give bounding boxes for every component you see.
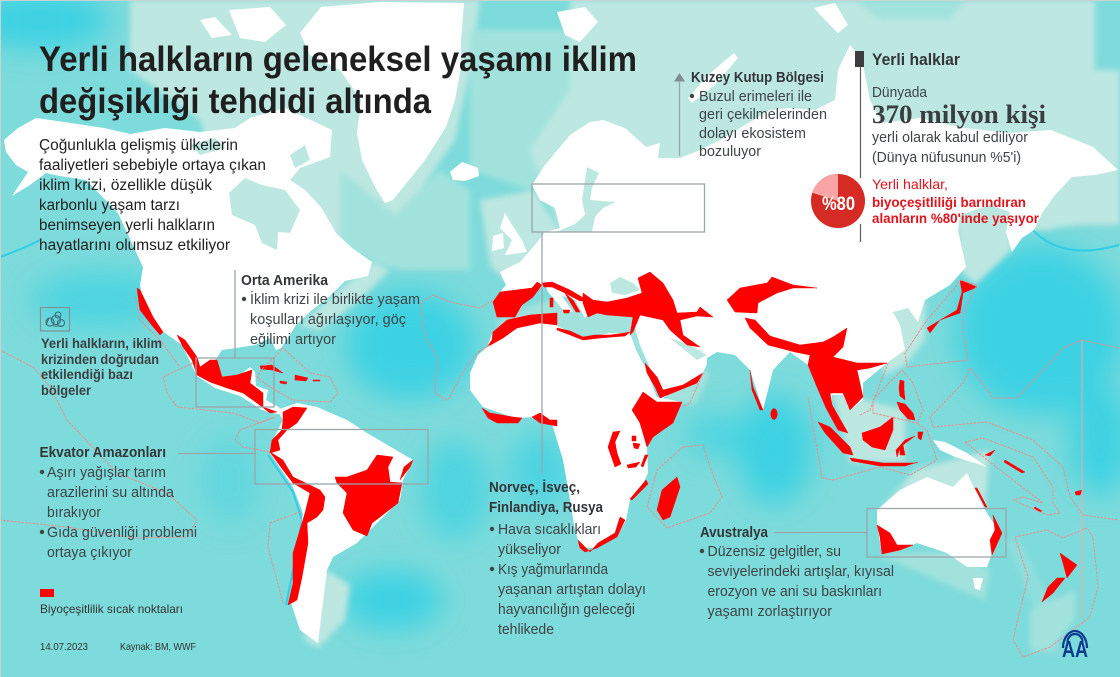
intro text: karbonlu yaşam tarzı xyxy=(39,197,180,214)
intro text: iklim krizi, özellikle düşük xyxy=(39,177,212,194)
red statement: biyoçeşitliliği barındıran xyxy=(872,194,1026,210)
callout: Avustralya: Düzensiz gelgitler, su xyxy=(708,544,841,560)
callout: Ekvator Amazonları: arazilerini su altında xyxy=(47,485,175,501)
callout: Orta Amerika: İklim krizi ile birlikte yaşam xyxy=(250,290,420,308)
panel: Yerli halklar: 370 milyon kişi xyxy=(872,100,1046,129)
callout: Norveç, İsveç, Finlandiya, Rusya: hayvancılığın geleceği xyxy=(498,602,635,618)
intro text: hayatlarını olumsuz etkiliyor xyxy=(39,237,230,254)
callout: Avustralya: erozyon ve ani su baskınları xyxy=(708,584,882,600)
logo: AA xyxy=(1062,631,1088,662)
red statement xyxy=(872,176,1040,226)
callout: Kuzey Kutup Bölgesi xyxy=(674,70,827,160)
panel: Yerli halklar xyxy=(811,51,1046,242)
title xyxy=(39,40,637,121)
callout: Orta Amerika: Orta Amerika xyxy=(241,273,329,289)
title: Yerli halkların geleneksel yaşamı iklim xyxy=(39,40,637,79)
callout: Avustralya xyxy=(700,508,1006,620)
callout: Kuzey Kutup Bölgesi: geri çekilmelerinden xyxy=(699,107,827,123)
callout: Ekvator Amazonları: bırakıyor xyxy=(47,505,101,521)
legend: biodiversity hotspots: Biyoçeşitlilik sıcak noktaları xyxy=(40,602,183,616)
callout: Orta Amerika xyxy=(196,270,420,407)
icon: climate clouds xyxy=(40,308,70,331)
callout: Norveç, İsveç, Finlandiya, Rusya: Hava sıcaklıkları xyxy=(498,522,601,538)
biodiversity hotspots xyxy=(137,272,1082,605)
pie chart: %80: %80 xyxy=(822,194,855,215)
callout: Ekvator Amazonları: Aşırı yağışlar tarım xyxy=(47,465,166,481)
panel: Yerli halklar: Dünyada xyxy=(872,85,928,101)
intro text: benimseyen yerli halkların xyxy=(39,217,215,234)
callout: Norveç, İsveç, Finlandiya, Rusya: yaşanan artıştan dolayı xyxy=(498,582,646,598)
intro text xyxy=(39,137,266,254)
red statement: alanların %80'inde yaşıyor xyxy=(872,210,1040,226)
callout: Ekvator Amazonları: Gıda güvenliği problemi xyxy=(47,525,197,541)
panel: Yerli halklar: (Dünya nüfusunun %5'i) xyxy=(872,150,1021,166)
callout: Norveç, İsveç, Finlandiya, Rusya xyxy=(489,184,704,638)
callout: Orta Amerika: koşulları ağırlaşıyor, göç xyxy=(250,312,406,328)
ecoregion dashed outlines xyxy=(0,280,1119,657)
callout: Norveç, İsveç, Finlandiya, Rusya: Norveç, İsveç, xyxy=(489,479,580,496)
callout: Orta Amerika: eğilimi artıyor xyxy=(250,332,336,348)
callout: Norveç, İsveç, Finlandiya, Rusya: Finlandiya, Rusya xyxy=(489,500,604,516)
pie chart: %80 xyxy=(811,174,865,228)
callout: Norveç, İsveç, Finlandiya, Rusya: Kış yağmurlarında xyxy=(498,562,609,578)
logo: AA: AA xyxy=(1062,636,1088,662)
callout: Ekvator Amazonları: Ekvator Amazonları xyxy=(40,445,166,461)
intro text: Çoğunlukla gelişmiş ülkelerin xyxy=(39,137,238,154)
panel: Yerli halklar: Yerli halklar xyxy=(872,51,961,69)
Peru and Aleutian trench lines xyxy=(0,227,1119,605)
legend heading: affected regions: bölgeler xyxy=(41,383,92,398)
legend heading: affected regions: Yerli halkların, iklim xyxy=(41,336,162,351)
callout: Norveç, İsveç, Finlandiya, Rusya: yükseliyor xyxy=(498,542,561,558)
red statement: Yerli halklar, xyxy=(872,176,948,192)
callout: Norveç, İsveç, Finlandiya, Rusya: tehlikede xyxy=(498,622,554,638)
callout: Avustralya: Avustralya xyxy=(700,525,769,541)
legend heading: affected regions: etkilendiği bazı xyxy=(41,367,133,382)
date and source xyxy=(40,641,196,653)
callout: Kuzey Kutup Bölgesi: dolayı ekosistem xyxy=(699,126,806,142)
callout: Ekvator Amazonları xyxy=(40,430,428,561)
callout: Avustralya: seviyelerindeki artışlar, kıyısal xyxy=(708,564,894,580)
callout: Ekvator Amazonları: ortaya çıkıyor xyxy=(47,545,132,561)
date and source: Kaynak: BM, WWF xyxy=(120,641,196,653)
callout: Avustralya: yaşamı zorlaştırıyor xyxy=(708,604,832,620)
date and source: 14.07.2023 xyxy=(40,641,88,653)
legend heading: affected regions: krizinden doğrudan xyxy=(41,352,159,367)
callout: Kuzey Kutup Bölgesi: Kuzey Kutup Bölgesi xyxy=(691,70,824,86)
legend heading: affected regions xyxy=(41,336,162,398)
legend: biodiversity hotspots xyxy=(40,589,183,616)
title: değişikliği tehdidi altında xyxy=(39,82,431,121)
callout: Kuzey Kutup Bölgesi: bozuluyor xyxy=(699,144,761,160)
panel: Yerli halklar: yerli olarak kabul ediliyor xyxy=(872,130,1028,146)
callout: Kuzey Kutup Bölgesi: Buzul erimeleri ile xyxy=(699,89,812,105)
intro text: faaliyetleri sebebiyle ortaya çıkan xyxy=(39,157,266,174)
